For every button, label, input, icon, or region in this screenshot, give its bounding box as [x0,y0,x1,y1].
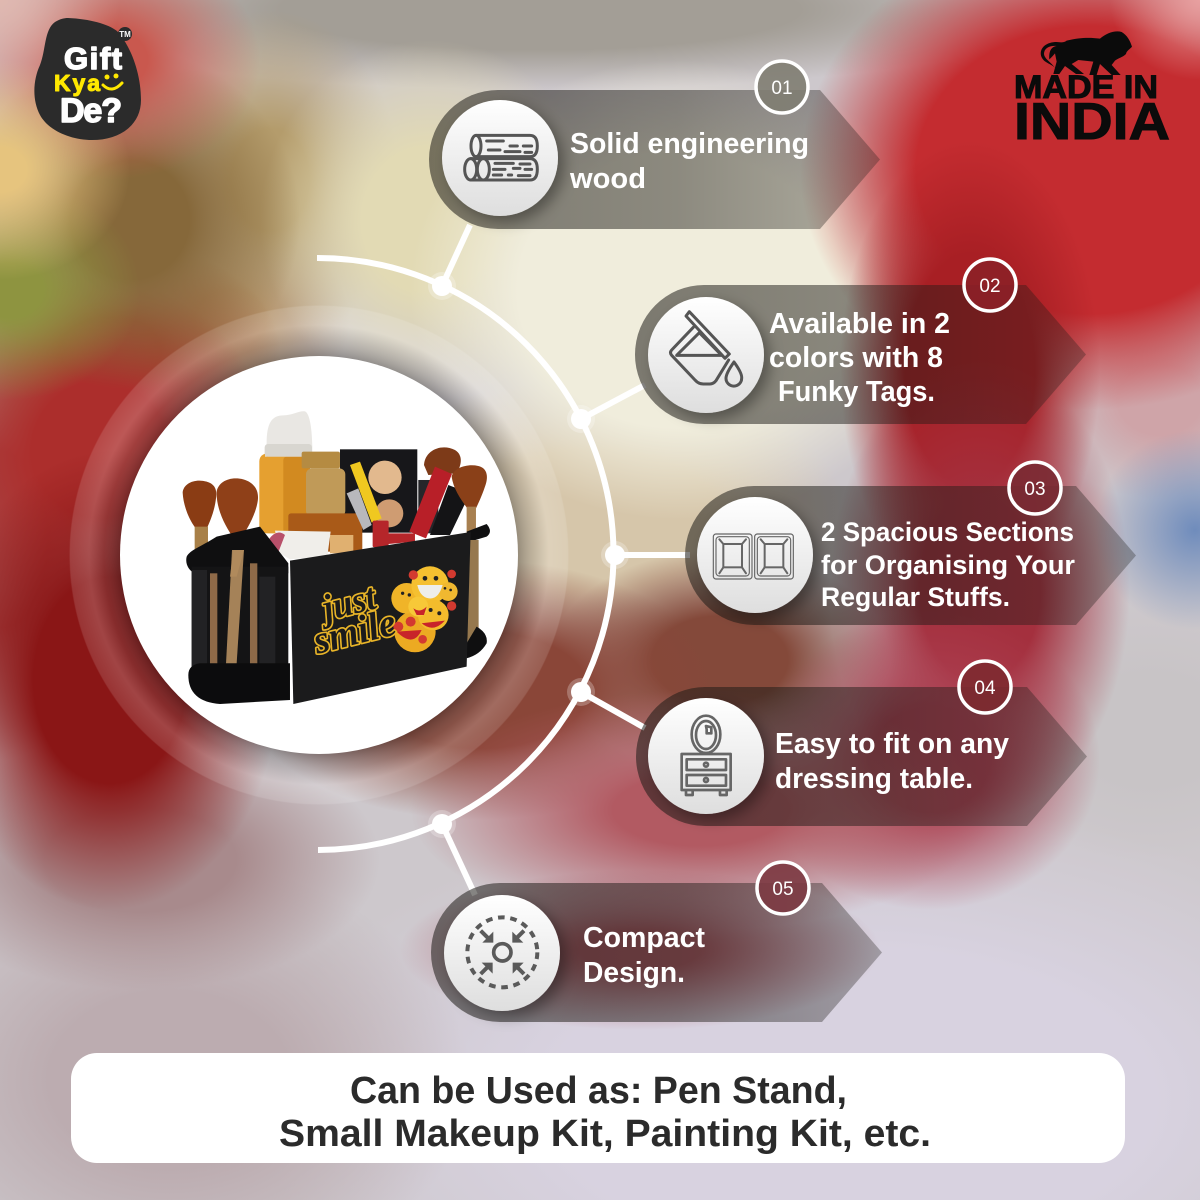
label: Available in 2 [769,308,950,340]
label: Compact [583,922,705,954]
label: for Organising Your [821,550,1075,580]
central arc with connectors [317,225,690,895]
feature 05 [431,862,882,1022]
number badge: 03 [1024,479,1046,500]
front panel [290,532,471,704]
small tube [275,531,331,559]
bottom banner [71,1053,1125,1163]
label: Solid engineering [570,128,809,160]
Made in India badge [1014,31,1170,151]
left brushes [183,481,216,527]
label: dressing table. [775,763,973,795]
number badge [1009,462,1061,514]
Made in India badge: INDIA [1014,93,1170,151]
icon: dressing table [682,716,731,795]
logo: Gift Kya De: De? [60,92,122,130]
product photo circle [69,305,569,805]
feature 02 [635,259,1086,424]
tag: emojis [391,566,458,652]
icon: compact arrows [467,917,537,987]
yellow and silver sticks [350,462,382,523]
label: Design. [583,957,685,989]
icon: paint bucket [670,312,742,386]
right brush [452,465,487,508]
right holder [467,524,490,542]
icon: logs [465,135,537,180]
arrow panel [636,687,1087,826]
feature 04 [636,661,1087,826]
bottom banner: Can be Used as: Pen Stand, [350,1070,847,1112]
number badge [964,259,1016,311]
arrow panel [635,285,1086,424]
icon disc [697,497,813,613]
label: Regular Stuffs. [821,582,1010,612]
icon disc [648,698,764,814]
product: makeup organizer [183,411,490,704]
Made in India badge: MADE IN [1014,69,1158,105]
logo: Gift Kya De [34,18,141,140]
bottom banner: Small Makeup Kit, Painting Kit, etc. [279,1113,931,1155]
logo: Gift Kya De: Kya [54,70,100,96]
number badge: 04 [974,678,996,699]
arrow panel [429,90,880,229]
label: Easy to fit on any [775,728,1009,760]
black tube [430,485,470,535]
tag: just smile: smile [308,600,400,663]
logo: Gift Kya De: TM [119,30,131,39]
tag: just smile [301,574,400,663]
label: wood [569,163,646,195]
label: 2 Spacious Sections [821,517,1074,547]
feature 03 [685,462,1136,625]
icon disc [444,895,560,1011]
arrow panel [431,883,882,1022]
rear brush [424,447,461,475]
spray can [259,453,310,533]
compact [340,449,417,533]
icon: two sections [713,534,793,579]
label: Funky Tags. [778,376,935,408]
tag: just smile: just [314,576,382,631]
number badge [756,61,808,113]
arrow panel [685,486,1136,625]
number badge: 01 [771,78,793,99]
number badge: 05 [772,879,794,900]
red lipstick [409,467,452,538]
number badge [959,661,1011,713]
label: colors with 8 [769,342,943,374]
number badge: 02 [979,276,1001,297]
logo: Gift Kya De: Gift [64,41,122,76]
feature 01 [429,61,880,229]
icon disc [442,100,558,216]
icon disc [648,297,764,413]
icon: lion [1041,31,1132,75]
left holder [186,527,288,577]
pump bottle [302,452,340,468]
number badge [757,862,809,914]
